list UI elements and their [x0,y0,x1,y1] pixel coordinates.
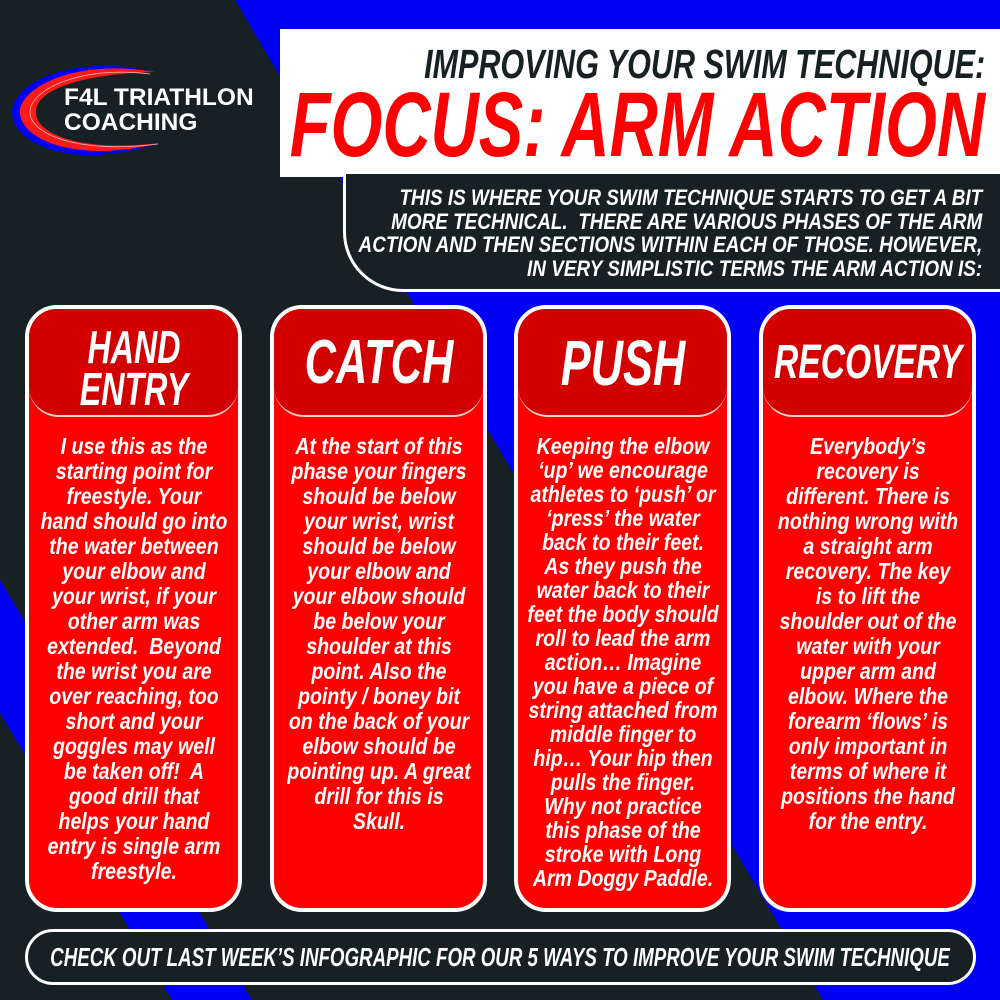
text: push: action… Imagine [544,649,701,675]
text: recovery: water with your [796,633,939,659]
text: recovery: recovery is [816,458,919,484]
text: catch: on the back of your [288,708,469,734]
text: recovery [777,433,958,834]
text: push: ‘press’ the water [546,505,699,531]
heading: catch: CATCH [304,328,453,397]
text: recovery: different. There is [786,483,949,509]
text: catch: phase your fingers [291,458,466,484]
text: hand entry: helps your hand [58,808,209,834]
logo text: COACHING [64,109,197,136]
text: recovery: upper arm and [800,658,935,684]
card: hand entry [25,305,242,912]
text: push: As they push the [544,553,701,579]
text: push: Keeping the elbow [536,433,709,459]
text: hand entry: starting point for [55,458,212,484]
text: recovery: terms of where it [789,758,946,784]
text: recovery: shoulder out of the [779,608,956,634]
text: catch: should be below [302,533,455,559]
text: push [527,433,719,891]
text: recovery: only important in [788,733,947,759]
heading: hand entry [29,309,238,417]
text: push: back to their feet. [542,529,703,555]
heading: hand entry: ENTRY [79,363,188,415]
intro text box: THIS IS WHERE YOUR SWIM TECHNIQUE STARTS TO GET A BIT [399,185,982,210]
text: hand entry: goggles may well [53,733,214,759]
text: push: athletes to ‘push’ or [530,481,715,507]
heading: catch [274,309,483,417]
text: catch: pointing up. A great [287,758,470,784]
text: push: Arm Doggy Paddle. [532,865,713,891]
text: push: stroke with Long [544,841,701,867]
text: recovery: positions the hand [781,783,954,809]
logo text: F4L TRIATHLON [64,84,254,111]
text: catch: your wrist, wrist [304,508,453,534]
footer callout [25,929,976,985]
text: recovery: is to lift the [815,583,920,609]
text: hand entry: the wrist you are [56,658,211,684]
text: recovery: for the entry. [808,808,927,834]
text: push: middle finger to [549,721,696,747]
text: catch: your elbow should [292,583,465,609]
text: push: you have a piece of [532,673,713,699]
text: hand entry: freestyle. Your [66,483,201,509]
text: hand entry: freestyle. [91,858,176,884]
text: push: ‘up’ we encourage [538,457,707,483]
text: push: hip… Your hip then [533,745,712,771]
card: catch [270,305,487,912]
text: recovery: forearm ‘flows’ is [787,708,948,734]
card: recovery [759,305,976,912]
text: catch: shoulder at this [306,633,451,659]
text: catch: elbow should be [302,733,455,759]
text: recovery: nothing wrong with [777,508,958,534]
text: catch: At the start of this [295,433,462,459]
logo text [64,84,254,136]
title box [280,29,1000,177]
text: hand entry: your wrist, if your [51,583,216,609]
main title: FOCUS: ARM ACTION [290,74,985,176]
text: push: water back to their [536,577,709,603]
text: push: Why not practice [544,793,701,819]
heading: hand entry: HAND [87,321,180,373]
intro text box: ACTION AND THEN SECTIONS WITHIN EACH OF THOSE. HOWEVER, [358,232,982,257]
text: push: pulls the finger. [550,769,695,795]
text: recovery: Everybody’s [810,433,925,459]
heading: push [518,309,727,417]
text: push: roll to lead the arm [535,625,710,651]
heading: recovery [763,309,972,417]
heading: recovery: RECOVERY [774,336,961,389]
intro text box: IN VERY SIMPLISTIC TERMS THE ARM ACTION IS: [527,256,982,280]
text: recovery: a straight arm [803,533,932,559]
text: hand entry: your elbow and [62,558,205,584]
intro text box [343,174,1000,292]
text: catch [286,433,472,834]
text: hand entry: hand should go into [40,508,227,534]
card: push [514,305,731,912]
text: hand entry [40,433,227,884]
text: hand entry: be taken off! A [63,758,204,784]
text: catch: pointy / boney bit [298,683,459,709]
footer callout: CHECK OUT LAST WEEK’S INFOGRAPHIC FOR OUR 5 WAYS TO IMPROVE YOUR SWIM TECHNIQUE [50,942,950,972]
text: catch: should be below [302,483,455,509]
text: recovery: elbow. Where the [787,683,948,709]
text: hand entry: entry is single arm [47,833,220,859]
text: hand entry: over reaching, too [49,683,218,709]
text: push: string attached from [528,697,717,723]
intro text box: MORE TECHNICAL. THERE ARE VARIOUS PHASES OF THE ARM [391,208,982,234]
text: hand entry: I use this as the [60,433,207,459]
text: catch: your elbow and [307,558,450,584]
text: catch: point. Also the [311,658,446,684]
heading: push: PUSH [560,327,685,399]
text: hand entry: extended. Beyond [47,633,220,659]
text: hand entry: the water between [49,533,218,559]
text: hand entry: short and your [65,708,202,734]
text: catch: be below your [313,608,444,634]
text: push: this phase of the [545,817,700,843]
text: recovery: recovery. The key [785,558,950,584]
text: catch: drill for this is [314,783,443,809]
logo [12,66,254,155]
text: hand entry: good drill that [68,783,199,809]
text: push: feet the body should [527,601,718,627]
subtitle: IMPROVING YOUR SWIM TECHNIQUE: [424,41,985,87]
text: catch: Skull. [352,808,405,834]
text: hand entry: other arm was [67,608,200,634]
